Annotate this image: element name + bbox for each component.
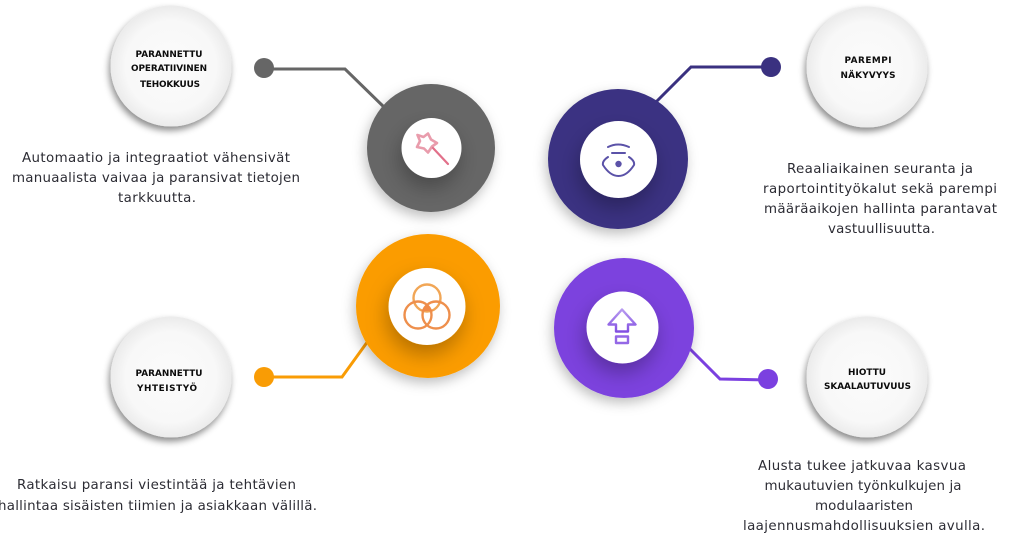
connector: navy xyxy=(655,67,771,103)
icon: eye xyxy=(603,144,634,176)
label circle: operational efficiency: PARANNETTU xyxy=(136,50,202,60)
label circle: better visibility: PAREMPI xyxy=(844,56,892,66)
label circle: better visibility xyxy=(806,6,928,128)
label circle: operational efficiency: OPERATIIVINEN xyxy=(131,64,207,74)
icon disc: navy xyxy=(580,121,657,198)
description: operational efficiency: tarkkuutta. xyxy=(118,191,196,206)
panel: operational efficiency xyxy=(12,6,495,212)
description: operational efficiency xyxy=(12,151,300,206)
icon: up arrow xyxy=(608,310,636,343)
description: refined scalability: laajennusmahdollisuuksien avulla. xyxy=(743,519,985,534)
label circle: better collaboration: YHTEISTYÖ xyxy=(136,383,197,394)
description: better visibility: Reaaliaikainen seuranta ja xyxy=(787,162,973,177)
label circle: refined scalability xyxy=(806,316,928,438)
description: refined scalability: modulaaristen xyxy=(815,499,913,514)
big circle: gray xyxy=(367,84,495,212)
connector: orange xyxy=(264,341,368,377)
big circle: orange xyxy=(356,234,500,378)
dot: purple xyxy=(758,369,778,389)
icon: magic wand xyxy=(417,134,448,164)
label circle: operational efficiency xyxy=(110,6,232,126)
big circle: purple xyxy=(554,258,694,398)
label circle: refined scalability: SKAALAUTUVUUS xyxy=(824,382,911,392)
panel: better collaboration xyxy=(0,234,500,514)
description: better visibility: määräaikojen hallinta parantavat xyxy=(764,202,997,217)
description: operational efficiency: Automaatio ja integraatiot vähensivät xyxy=(22,151,290,166)
icon disc: orange xyxy=(388,268,466,345)
description: better collaboration: hallintaa sisäisten tiimien ja asiakkaan välillä. xyxy=(0,499,317,514)
label circle: better collaboration xyxy=(110,316,232,438)
label circle: refined scalability: HIOTTU xyxy=(848,368,886,378)
icon: venn circles xyxy=(404,284,450,328)
icon disc: gray xyxy=(402,118,462,178)
dot: navy xyxy=(761,57,781,77)
description: better visibility xyxy=(763,162,997,237)
description: better collaboration: Ratkaisu paransi viestintää ja tehtävien xyxy=(17,478,296,493)
description: refined scalability: mukautuvien työnkulkujen ja xyxy=(764,479,962,494)
description: refined scalability: Alusta tukee jatkuvaa kasvua xyxy=(758,459,966,474)
label circle: operational efficiency: TEHOKKUUS xyxy=(140,80,200,90)
label circle: better visibility: NÄKYVYYS xyxy=(840,70,896,81)
description: better visibility: vastuullisuutta. xyxy=(828,222,935,237)
big circle: navy xyxy=(548,89,688,229)
dot: orange xyxy=(254,367,274,387)
description: refined scalability xyxy=(743,459,985,534)
description: operational efficiency: manuaalista vaivaa ja paransivat tietojen xyxy=(12,171,300,186)
panel: refined scalability xyxy=(554,258,985,534)
description: better collaboration xyxy=(0,478,317,514)
connector: gray xyxy=(264,69,386,109)
panel: better visibility xyxy=(548,6,997,237)
description: better visibility: raportointityökalut sekä parempi xyxy=(763,182,997,197)
label circle: better collaboration: PARANNETTU xyxy=(136,369,202,379)
connector: purple xyxy=(690,349,768,380)
dot: gray xyxy=(254,58,274,78)
icon disc: purple xyxy=(586,292,658,364)
